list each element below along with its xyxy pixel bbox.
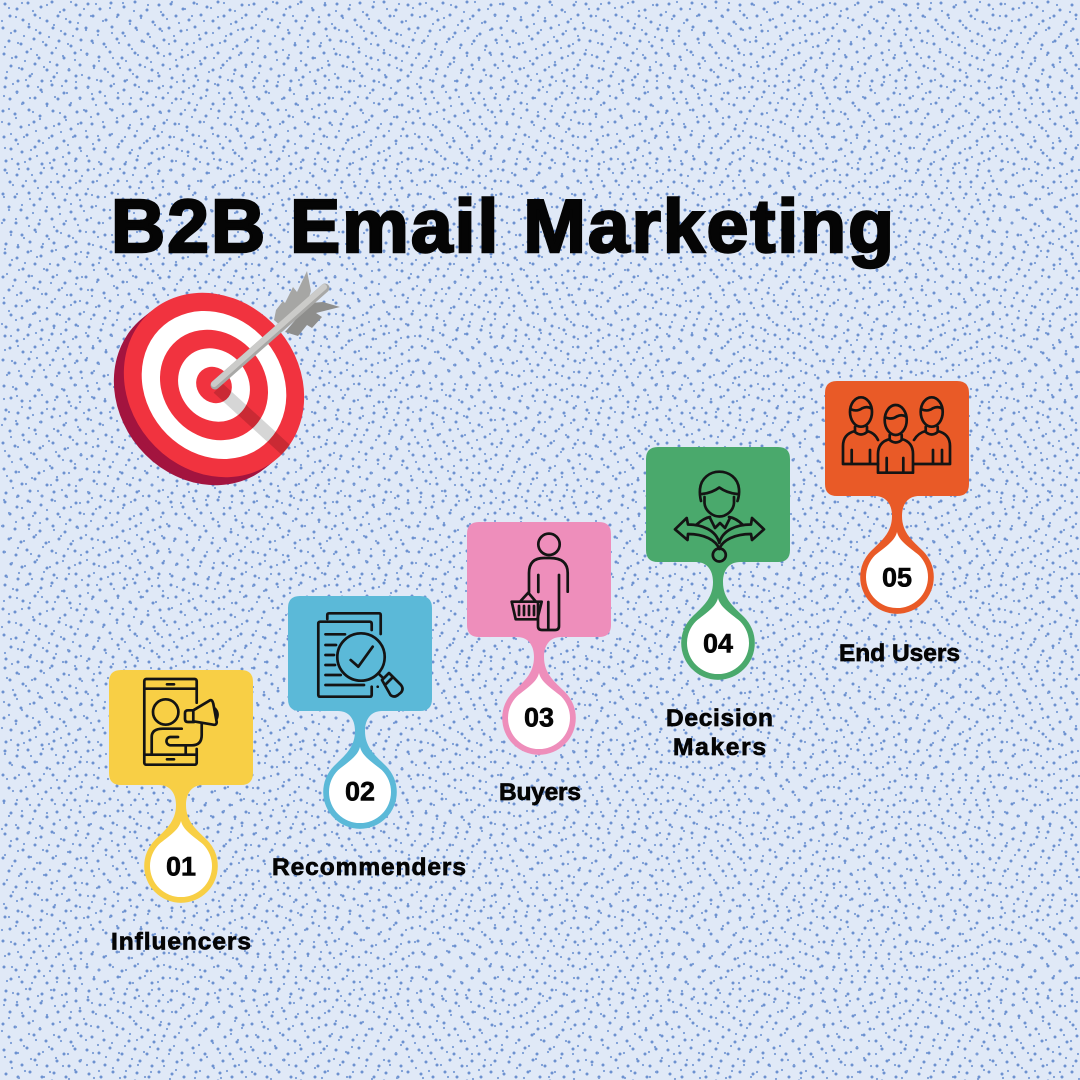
number bubble (866, 532, 928, 608)
step 3: Buyers (467, 522, 611, 806)
step 2: Recommenders (272, 596, 466, 881)
number: 05 (882, 562, 912, 592)
step 1: Influencers (109, 670, 253, 956)
icon: phone with megaphone (144, 679, 218, 765)
card and drop connector (646, 447, 790, 680)
number: 04 (703, 628, 733, 658)
label: End Users (839, 640, 960, 667)
icon: person with basket (512, 534, 568, 630)
number: 02 (345, 776, 375, 806)
number: 03 (524, 702, 554, 732)
arrow shaft (214, 287, 325, 385)
number bubble (508, 673, 570, 749)
label: Influencers (111, 928, 251, 956)
card and drop connector (109, 670, 253, 903)
icon: group of three users (843, 397, 950, 473)
number: 01 (166, 852, 196, 882)
icon: target with arrow (77, 256, 341, 522)
title: B2B Email Marketing (111, 184, 894, 268)
target face rings (87, 256, 341, 514)
step 5: End Users (825, 381, 969, 667)
number bubble (329, 747, 391, 823)
number bubble (150, 821, 212, 897)
icon: documents with magnifier (318, 613, 402, 697)
card and drop connector (467, 522, 611, 755)
number bubble (687, 598, 749, 674)
label: Buyers (499, 779, 581, 806)
step 4: Decision Makers (646, 447, 790, 761)
target rim (77, 260, 336, 522)
label: Decision (666, 705, 773, 732)
arrow shadow (218, 388, 286, 450)
card and drop connector (825, 381, 969, 614)
arrow fletching (274, 271, 340, 336)
label (666, 705, 773, 761)
icon: decision maker with arrows (675, 472, 764, 562)
label: Recommenders (272, 854, 466, 881)
label: Makers (673, 734, 766, 761)
card and drop connector (288, 596, 432, 829)
